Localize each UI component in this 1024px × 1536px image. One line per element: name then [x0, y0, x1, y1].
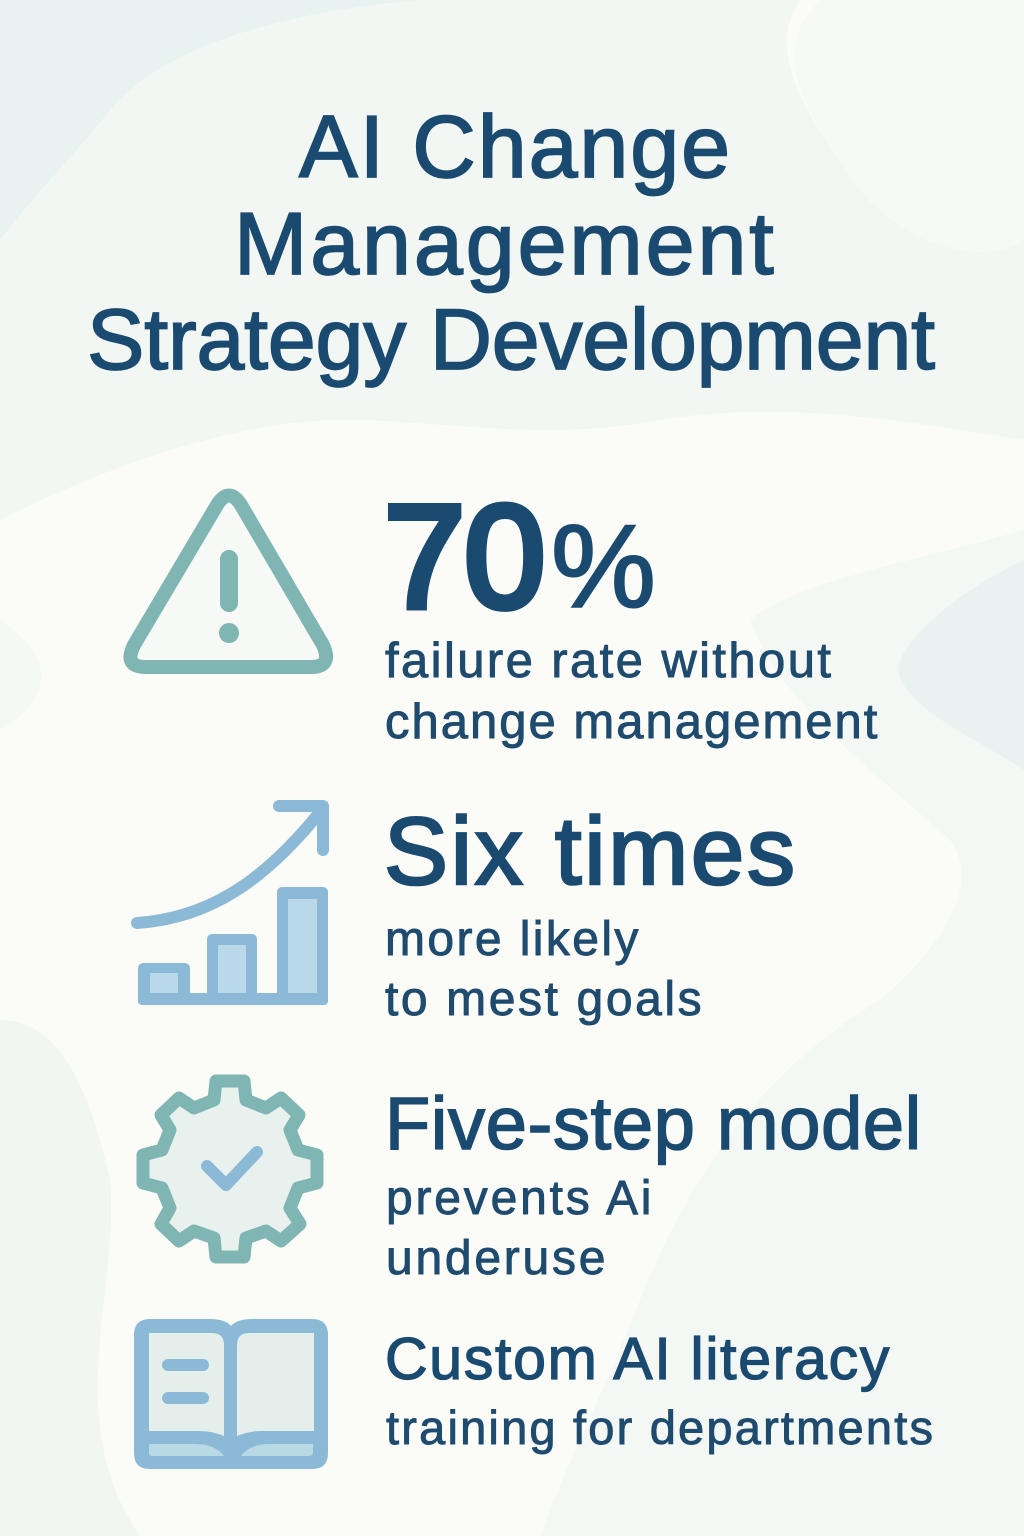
stat: custom AI literacy: training for departments [386, 1401, 935, 1454]
icon: warning triangle [124, 488, 334, 674]
stat: 70% failure rate: change management [385, 695, 879, 749]
stat: six times: Six times [384, 798, 798, 905]
title: Management [234, 194, 777, 293]
stat: six times: to mest goals [385, 973, 704, 1026]
stat: 70% failure rate: % [551, 501, 656, 633]
stat: five-step model: Five-step model [385, 1082, 922, 1165]
stat: 70% failure rate: failure rate without [385, 634, 833, 688]
stat: five-step model: prevents Ai [386, 1172, 654, 1225]
stat: six times: more likely [385, 913, 641, 966]
stat: 70% failure rate: 70 [384, 475, 544, 638]
icon: growth chart [131, 800, 329, 1005]
stat: custom AI literacy: Custom AI literacy [385, 1326, 891, 1392]
stat: six times [384, 798, 798, 1026]
title [87, 97, 936, 388]
stat: five-step model [385, 1082, 922, 1285]
stat: custom AI literacy [385, 1326, 935, 1454]
title: Strategy Development [87, 292, 935, 388]
stat: 70% failure rate [384, 475, 879, 749]
icon: gear with check [136, 1074, 324, 1264]
icon: open book [134, 1319, 328, 1469]
stat: five-step model: underuse [386, 1232, 608, 1285]
title: AI Change [299, 97, 732, 196]
